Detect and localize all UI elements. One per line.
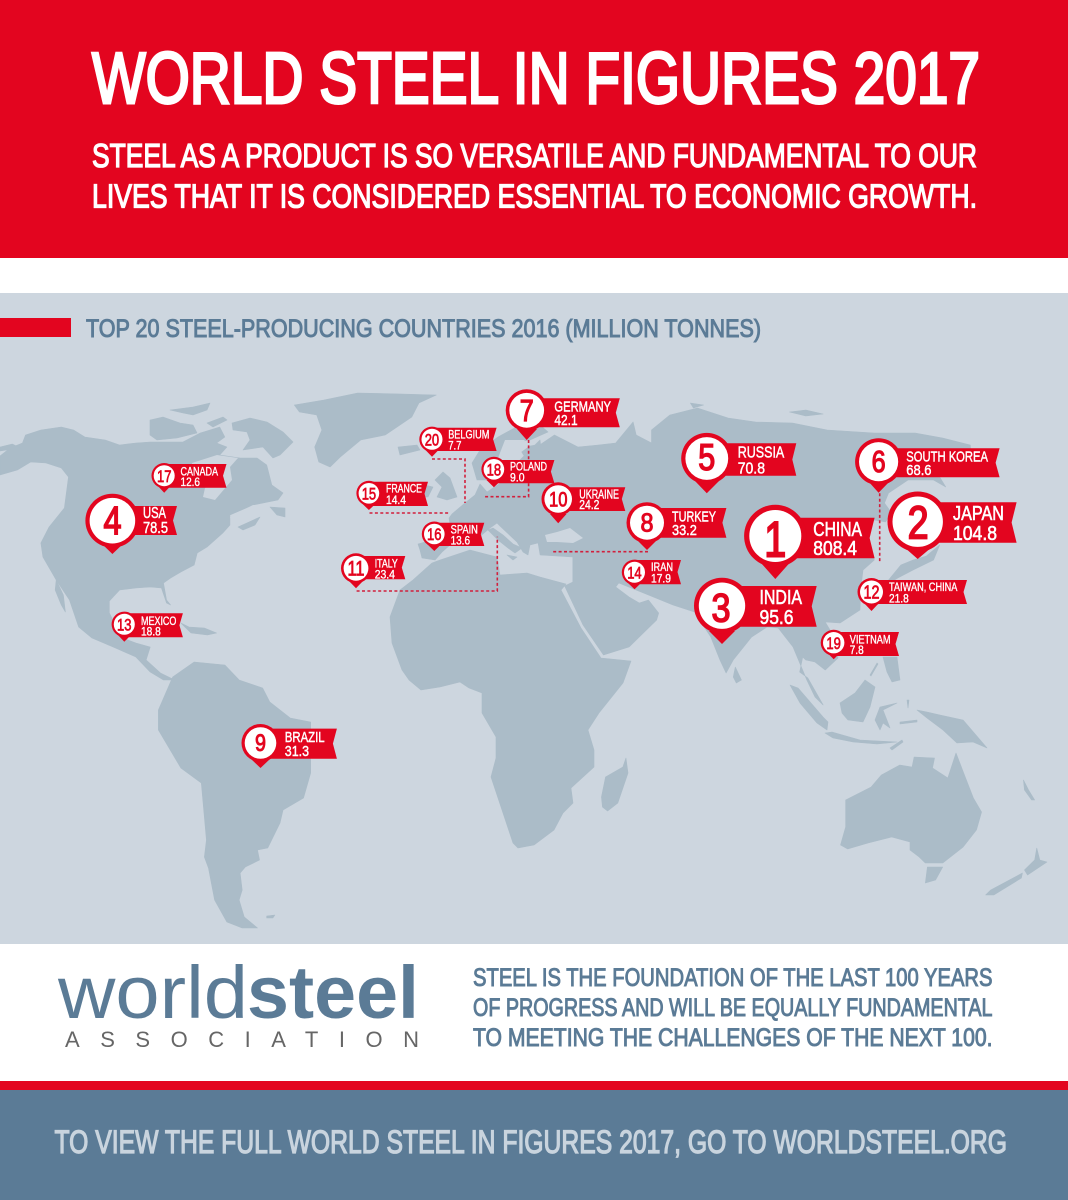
- pin: 18 Poland 9.0: 9.0: [510, 471, 525, 485]
- Scandinavia: [472, 425, 548, 480]
- pin: 18 Poland 9.0: POLAND: [510, 460, 547, 474]
- pin: 6 South Korea 68.6: [855, 438, 1000, 493]
- pin: 2 Japan 104.8: 104.8: [953, 523, 997, 545]
- pin: 7 Germany 42.1: [506, 389, 620, 440]
- pin: 9 Brazil 31.3: 9: [255, 730, 266, 757]
- pin: 12 Taiwan, China 21.8: 21.8: [889, 593, 909, 605]
- pin: 5 Russia 70.8: [681, 433, 796, 493]
- pin: 19 Vietnam 7.8: 7.8: [850, 643, 864, 657]
- pin: 17 Canada 12.6: CANADA: [180, 465, 218, 479]
- pin: 14 Iran 17.9: [622, 560, 681, 589]
- closing statement: [473, 964, 993, 1052]
- South America and Falklands: [158, 662, 311, 928]
- pin: 18 Poland 9.0: 18: [487, 460, 501, 480]
- logo: worldsteel Association: steel: [247, 951, 419, 1034]
- pin: 8 Turkey 33.2: TURKEY: [672, 509, 716, 526]
- pin: 5 Russia 70.8: RUSSIA: [738, 444, 785, 461]
- pin: 11 Italy 23.4: 23.4: [375, 567, 395, 581]
- pin: 1 China 808.4: [744, 505, 875, 579]
- pin: 2 Japan 104.8: 2: [908, 496, 929, 548]
- section heading: TOP 20 STEEL-PRODUCING COUNTRIES 2016 (MILLION TONNES): [86, 315, 761, 343]
- pin: 15 France 14.4: 14.4: [386, 493, 406, 507]
- pin: 16 Spain 13.6: 16: [427, 525, 442, 544]
- pin: 19 Vietnam 7.8: [821, 630, 899, 659]
- pin: 7 Germany 42.1: GERMANY: [554, 399, 611, 416]
- panel: world map: [0, 293, 1068, 944]
- pin: 19 Vietnam 7.8: VIETNAM: [850, 632, 891, 646]
- Asia and Oceania: [522, 403, 1047, 895]
- pin: 6 South Korea 68.6: 68.6: [906, 462, 932, 479]
- seas cut out of the land: [192, 440, 583, 543]
- pin: 4 USA 78.5: 4: [104, 499, 122, 543]
- pin: 12 Taiwan, China 21.8: 12: [864, 582, 880, 602]
- pin: 9 Brazil 31.3: BRAZIL: [285, 729, 325, 746]
- pin: 11 Italy 23.4: ITALY: [375, 556, 398, 570]
- pin: 18 Poland 9.0: [481, 457, 554, 487]
- pin: 5 Russia 70.8: 5: [698, 437, 715, 478]
- pin: 7 Germany 42.1: 42.1: [554, 412, 578, 429]
- dotted leader lines: [357, 440, 880, 591]
- pin: 1 China 808.4: 1: [764, 512, 786, 568]
- pin: 9 Brazil 31.3: 31.3: [285, 743, 309, 760]
- panel: red header: [0, 0, 1068, 258]
- pin: 17 Canada 12.6: 12.6: [180, 475, 200, 489]
- pin: 6 South Korea 68.6: 6: [872, 444, 886, 479]
- pin: 10 Ukraine 24.2: 24.2: [579, 498, 599, 512]
- pin: 13 Mexico 18.8: [112, 612, 183, 642]
- pin: 11 Italy 23.4: 11: [348, 558, 364, 580]
- panel: footer call to action: [0, 1090, 1068, 1200]
- pin: 6 South Korea 68.6: SOUTH KOREA: [906, 449, 988, 466]
- pin: 16 Spain 13.6: 13.6: [451, 534, 470, 548]
- pin: 3 India 95.6: 3: [712, 587, 730, 631]
- islands and small landmasses: [150, 403, 987, 750]
- pin: 4 USA 78.5: 78.5: [143, 520, 168, 537]
- pin: 12 Taiwan, China 21.8: [858, 578, 967, 611]
- Africa: [390, 550, 631, 848]
- pin: 14 Iran 17.9: 17.9: [651, 571, 671, 585]
- pin: 1 China 808.4: CHINA: [813, 519, 863, 541]
- pin: 11 Italy 23.4: [341, 553, 405, 588]
- pin: 17 Canada 12.6: [152, 463, 226, 493]
- pin: 16 Spain 13.6: [422, 522, 484, 551]
- logo: worldsteel Association: ASSOCIATION: [65, 1027, 419, 1052]
- pin: 20 Belgium 7.7: 7.7: [448, 438, 462, 452]
- pin: 19 Vietnam 7.8: 19: [826, 634, 841, 653]
- subtitle: [92, 138, 977, 216]
- pin: 3 India 95.6: INDIA: [760, 587, 803, 609]
- pin: 9 Brazil 31.3: [242, 724, 337, 768]
- pin: 13 Mexico 18.8: 13: [117, 616, 132, 634]
- world map landmasses: [0, 393, 1047, 928]
- pin: 15 France 14.4: 15: [362, 484, 376, 504]
- pin: 8 Turkey 33.2: [626, 502, 726, 550]
- pin: 12 Taiwan, China 21.8: TAIWAN, CHINA: [889, 582, 958, 594]
- pin: 15 France 14.4: FRANCE: [386, 482, 422, 496]
- pin: 20 Belgium 7.7: [419, 427, 497, 457]
- pin: 4 USA 78.5: USA: [143, 505, 166, 522]
- pin: 2 Japan 104.8: JAPAN: [953, 503, 1004, 525]
- logo: worldsteel Association: [57, 951, 419, 1052]
- pin: 13 Mexico 18.8: 18.8: [141, 625, 161, 639]
- red divider band: [0, 1081, 1068, 1090]
- pin: 14 Iran 17.9: IRAN: [651, 560, 673, 574]
- pin: 14 Iran 17.9: 14: [627, 564, 642, 582]
- section accent bar: [0, 318, 71, 337]
- pin: 3 India 95.6: [694, 578, 817, 644]
- pin: 3 India 95.6: 95.6: [760, 607, 794, 629]
- pin: 16 Spain 13.6: SPAIN: [451, 522, 478, 536]
- Europe: [418, 440, 545, 560]
- pin: 13 Mexico 18.8: MEXICO: [141, 614, 176, 628]
- pin: 20 Belgium 7.7: BELGIUM: [448, 427, 489, 441]
- pin: 15 France 14.4: [356, 481, 428, 510]
- pin: 17 Canada 12.6: 17: [157, 467, 172, 486]
- pin: 10 Ukraine 24.2: UKRAINE: [579, 487, 619, 501]
- pin: 5 Russia 70.8: 70.8: [738, 460, 765, 477]
- logo: worldsteel Association: world: [57, 951, 248, 1034]
- pin: 1 China 808.4: 808.4: [813, 538, 857, 560]
- pin: 8 Turkey 33.2: 8: [640, 508, 654, 538]
- pin: 20 Belgium 7.7: 20: [425, 430, 439, 450]
- pin: 10 Ukraine 24.2: [542, 482, 625, 523]
- pin: 10 Ukraine 24.2: 10: [549, 489, 568, 512]
- pin: 8 Turkey 33.2: 33.2: [672, 522, 697, 539]
- North America and Greenland: [0, 393, 436, 680]
- pin: 2 Japan 104.8: [888, 492, 1017, 559]
- pin: 7 Germany 42.1: 7: [520, 393, 534, 428]
- pin: 4 USA 78.5: [85, 494, 177, 554]
